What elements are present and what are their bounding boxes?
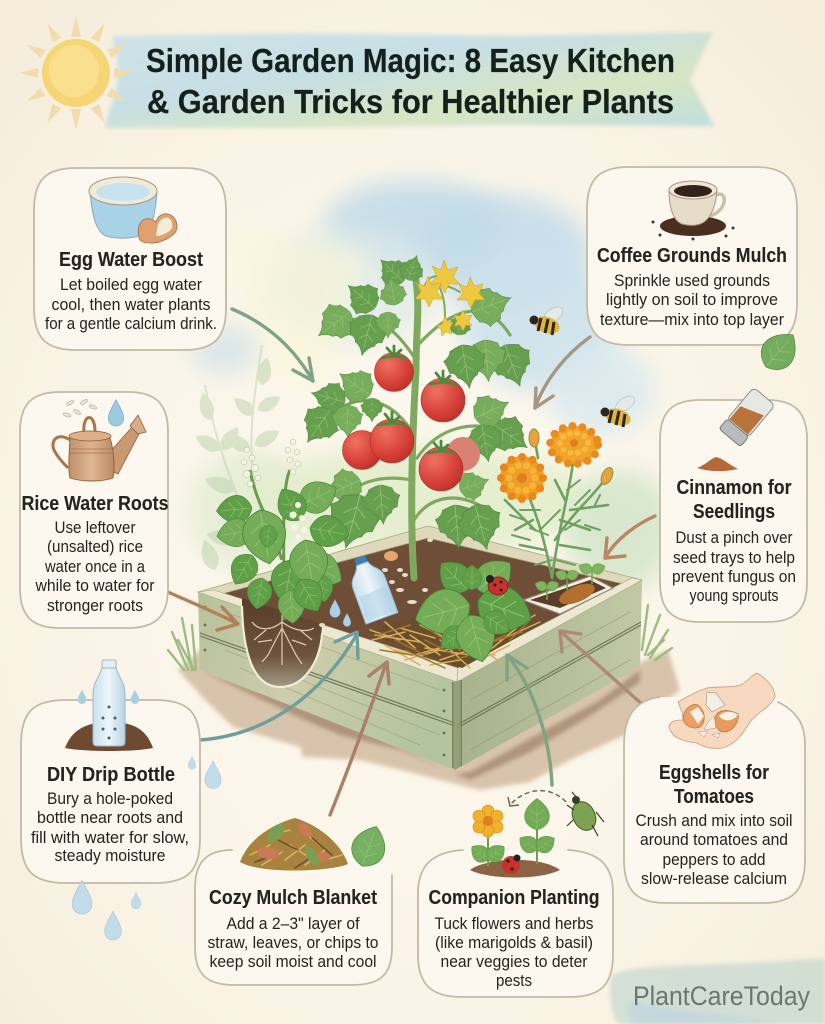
marigold buds: [529, 429, 615, 486]
arrow: mulch to straw: [330, 662, 389, 815]
description: [434, 914, 594, 990]
arrow: companion planting to bed: [507, 655, 552, 785]
marigold flower: [500, 456, 544, 500]
icon: leaf: [753, 324, 806, 378]
description: Bury a hole-poked: [47, 789, 173, 808]
description: Sprinkle used grounds: [614, 271, 770, 290]
watercolor sky wash: [190, 180, 675, 590]
icon: cinnamon jar: [697, 387, 775, 471]
description: [208, 914, 378, 971]
description: [45, 275, 217, 333]
water droplets: [72, 756, 221, 940]
heading: Coffee Grounds Mulch: [597, 245, 787, 267]
panel: coffee grounds mulch: [587, 167, 806, 378]
description: [31, 789, 189, 865]
description: bottle near roots and: [37, 808, 183, 827]
banner title: [105, 32, 714, 128]
description: prevent fungus on: [672, 567, 796, 586]
description: Dust a pinch over: [676, 528, 793, 547]
description: for a gentle calcium drink.: [45, 314, 217, 333]
mulch straw: [365, 610, 545, 668]
water bottle in soil: [330, 551, 398, 626]
description: seed trays to help: [673, 548, 795, 567]
tomato flowers: [415, 260, 485, 336]
heading: Cozy Mulch Blanket: [209, 887, 377, 909]
panel: cinnamon for seedlings: [660, 387, 807, 622]
panel: rice water roots: [20, 392, 168, 628]
description: Let boiled egg water: [60, 275, 202, 294]
icon: bowl and eggshell: [89, 177, 177, 243]
panel: companion planting: [418, 791, 613, 997]
description: [636, 811, 792, 888]
heading: Rice Water Roots: [22, 493, 168, 515]
description: Add a 2–3" layer of: [226, 914, 360, 933]
icon: coffee cup on grounds: [652, 181, 734, 240]
heading: [659, 762, 769, 808]
description: (unsalted) rice: [47, 537, 143, 556]
left wood face: [198, 590, 458, 770]
arrow: coffee grounds to soil: [535, 337, 590, 408]
tomato plant: [292, 249, 540, 578]
panel: cozy mulch blanket: [195, 818, 392, 985]
description: fill with water for slow,: [31, 828, 189, 847]
panel: egg water boost: [34, 168, 226, 350]
pebbles and eggshell bits: [319, 538, 433, 627]
watermark: PlantCareToday: PlantCareToday: [633, 981, 810, 1011]
description: cool, then water plants: [52, 295, 210, 314]
icon: drip bottle in soil: [65, 660, 153, 751]
stem and branches: [325, 272, 510, 578]
marigolds: [500, 426, 615, 614]
ladybug: [486, 575, 508, 595]
tomato calyxes: [378, 346, 456, 453]
description: texture—mix into top layer: [600, 310, 784, 329]
description: straw, leaves, or chips to: [208, 933, 378, 952]
description: near veggies to deter: [440, 952, 588, 971]
seedling tray: [523, 561, 613, 614]
beetle: [567, 792, 604, 836]
low basil plant with ladybug: [409, 550, 539, 667]
icon: flower, plant, ladybug, beetle: [467, 791, 604, 878]
soil inside bed: [212, 534, 632, 672]
arrow: drip bottle to bottle: [200, 632, 358, 740]
description: [600, 271, 784, 329]
description: around tomatoes and: [640, 830, 788, 849]
description: Crush and mix into soil: [636, 811, 792, 830]
heading: Cinnamon for: [676, 477, 792, 499]
description: [35, 518, 155, 615]
flower: [473, 805, 503, 837]
icon: leaf: [346, 821, 392, 872]
arrow: eggshells to soil: [560, 631, 643, 705]
ladybug: [502, 854, 520, 874]
description: (like marigolds & basil): [435, 933, 593, 952]
description: water once in a: [44, 557, 145, 576]
arrow: egg water to plant: [232, 309, 313, 381]
dashed arrow: [508, 791, 566, 806]
icon: mulch pile: [240, 818, 348, 870]
grass tufts: [168, 605, 672, 670]
icon: bee: [600, 393, 637, 429]
description: Tuck flowers and herbs: [434, 914, 594, 933]
arrow: rice water to roots: [168, 592, 238, 630]
heading: Egg Water Boost: [59, 249, 203, 271]
icon: watering can with drop and rice: [53, 399, 146, 481]
watermark: PlantCareToday: [610, 958, 825, 1024]
right wood face: [453, 578, 642, 770]
heading: Eggshells for: [659, 762, 769, 784]
description: Use leftover: [54, 518, 136, 537]
panel: eggshells for tomatoes: [624, 673, 805, 903]
description: slow-release calcium: [641, 869, 787, 888]
panel: diy drip bottle: [21, 660, 200, 883]
heading: [676, 477, 792, 523]
soil cutaway with roots: [242, 598, 322, 687]
heading: DIY Drip Bottle: [47, 764, 175, 786]
description: pests: [496, 971, 532, 990]
description: stronger roots: [47, 596, 143, 615]
title text: [146, 42, 675, 120]
raised garden bed: [198, 526, 642, 770]
description: lightly on soil to improve: [606, 290, 778, 309]
description: while to water for: [35, 576, 155, 595]
basil plant with flowers: [214, 439, 352, 625]
description: [672, 528, 796, 605]
marigold flower: [550, 426, 598, 464]
back rim: [198, 526, 642, 596]
icon: sun: [19, 16, 133, 130]
icon: hand holding eggshells: [669, 673, 775, 748]
tomatoes: [342, 352, 480, 491]
faded background foliage: [192, 345, 284, 573]
description: steady moisture: [54, 846, 166, 865]
title text: Simple Garden Magic: 8 Easy Kitchen: [146, 42, 675, 79]
ground soil under the bed: [178, 650, 680, 790]
heading: Companion Planting: [428, 887, 600, 909]
flower spikes: [241, 439, 301, 487]
description: young sprouts: [690, 586, 778, 605]
description: keep soil moist and cool: [210, 952, 376, 971]
heading: Tomatoes: [674, 786, 754, 808]
description: peppers to add: [662, 850, 766, 869]
heading: Seedlings: [693, 501, 775, 523]
title text: & Garden Tricks for Healthier Plants: [147, 83, 674, 120]
water drops: [330, 600, 351, 626]
arrow: cinnamon to seedlings: [605, 516, 655, 558]
tomato leaves: [292, 249, 540, 555]
icon: bee: [530, 304, 565, 337]
